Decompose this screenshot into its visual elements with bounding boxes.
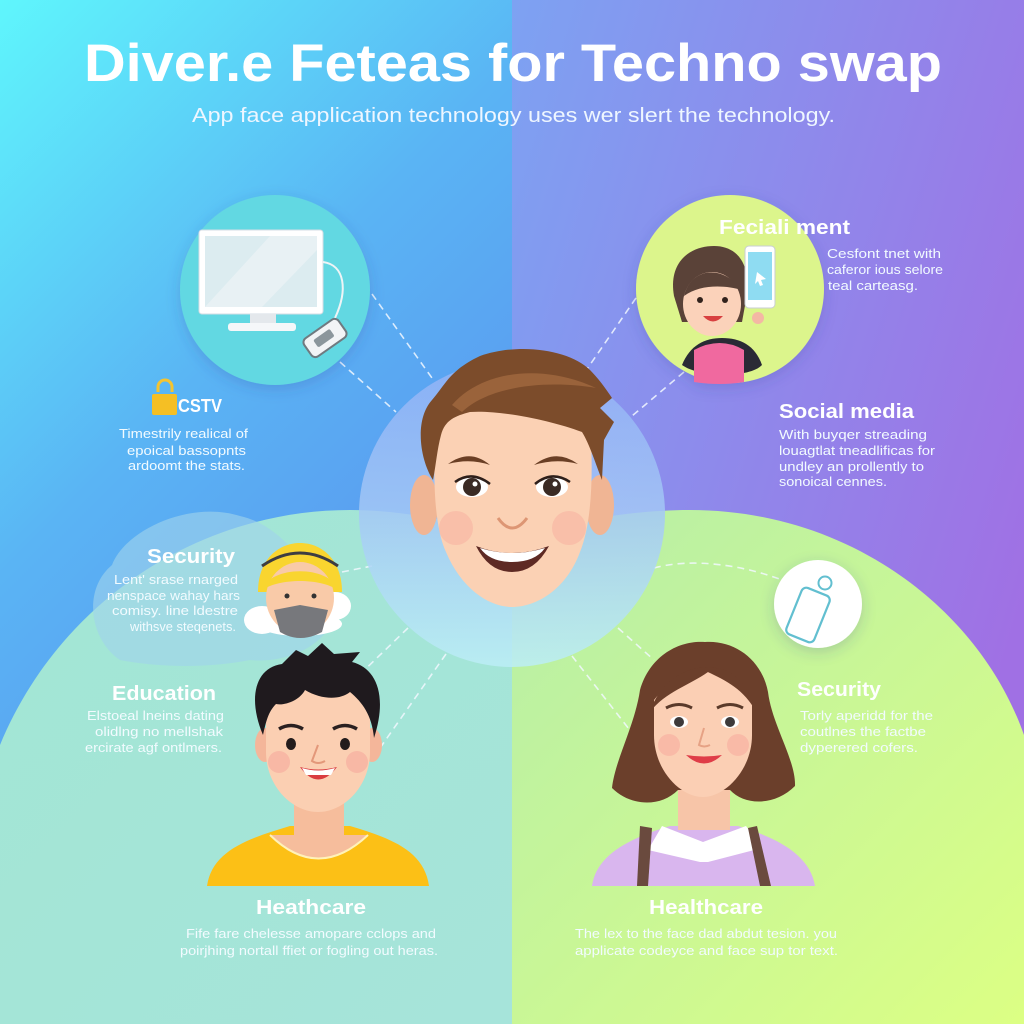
icon: masked person bbox=[244, 543, 351, 638]
panel: Healthcare left: poirjhing nortall ffiet or fogling out heras. bbox=[180, 943, 438, 958]
panel: Facial ment: Cesfont tnet with bbox=[827, 246, 941, 261]
dashed connectors bbox=[340, 294, 782, 748]
panel: Social media: With buyqer streading bbox=[779, 427, 927, 442]
panel: CSTV: ardoomt the stats. bbox=[128, 458, 245, 473]
panel: Education: ercirate agf ontlmers. bbox=[85, 740, 222, 755]
panel: Healthcare left bbox=[180, 897, 438, 958]
panel: Security cloud bbox=[93, 512, 335, 666]
panel: Healthcare right: applicate codeyce and face sup tor text. bbox=[575, 943, 838, 958]
panel: Education: olidlng no mellshak bbox=[95, 724, 224, 739]
illustration: boy in yellow shirt bbox=[207, 643, 429, 886]
panel: Facial ment: teal carteasg. bbox=[828, 278, 918, 293]
panel: CSTV bbox=[119, 380, 248, 473]
panel: Social media: undley an prollently to bbox=[779, 459, 924, 474]
panel: Facial ment bbox=[719, 217, 943, 293]
panel: Facial ment: caferor ious selore bbox=[827, 262, 943, 277]
panel: Healthcare right: Healthcare bbox=[649, 897, 763, 919]
panel: Social media bbox=[779, 401, 936, 489]
panel: CSTV: Timestrily realical of bbox=[119, 426, 248, 441]
panel: Security cloud: nenspace wahay hars bbox=[107, 588, 241, 603]
panel: Healthcare left: Heathcare bbox=[256, 897, 366, 919]
icon: phone user circle bbox=[636, 195, 824, 384]
subtitle: App face application technology uses wer slert the technology. bbox=[192, 105, 835, 127]
panel: Security right: Torly aperidd for the bbox=[800, 708, 933, 723]
icon: computer circle bbox=[180, 195, 370, 385]
panel: Security right bbox=[797, 679, 933, 755]
panel: Education bbox=[85, 683, 224, 755]
panel: Education: Elstoeal lneins dating bbox=[87, 708, 224, 723]
panel: CSTV: epoical bassopnts bbox=[127, 443, 247, 458]
panel: Healthcare right: The lex to the face dad abdut tesion. you bbox=[575, 926, 837, 941]
panel: Security cloud: withsve steqenets. bbox=[129, 619, 236, 634]
icon: phone circle bbox=[774, 560, 862, 648]
center translucent circle bbox=[359, 361, 665, 667]
title: Diver.e Feteas for Techno swap bbox=[84, 34, 942, 93]
panel: Healthcare left: Fife fare chelesse amopare cclops and bbox=[186, 926, 436, 941]
panel: Security right: Security bbox=[797, 679, 882, 701]
panel: Healthcare right bbox=[575, 897, 838, 958]
panel: Security cloud: Lent' srase rnarged bbox=[114, 572, 238, 587]
icon: padlock bbox=[152, 380, 177, 415]
panel: Education: Education bbox=[112, 683, 216, 705]
illustration: central face bbox=[410, 349, 614, 607]
panel: Security right: coutlnes the factbe bbox=[800, 724, 926, 739]
panel: Social media: sonoical cennes. bbox=[779, 474, 887, 489]
panel: Security cloud: Security bbox=[147, 546, 236, 568]
illustration: woman with brown hair bbox=[592, 642, 815, 886]
panel: CSTV: CSTV bbox=[178, 396, 222, 416]
panel: Social media: Social media bbox=[779, 401, 915, 423]
panel: Social media: louagtlat tneadlificas for bbox=[779, 443, 936, 458]
panel: Security cloud: comisy. line ldestre bbox=[112, 603, 238, 618]
panel: Security right: dyperered cofers. bbox=[800, 740, 918, 755]
panel: Facial ment: Feciali ment bbox=[719, 217, 850, 239]
